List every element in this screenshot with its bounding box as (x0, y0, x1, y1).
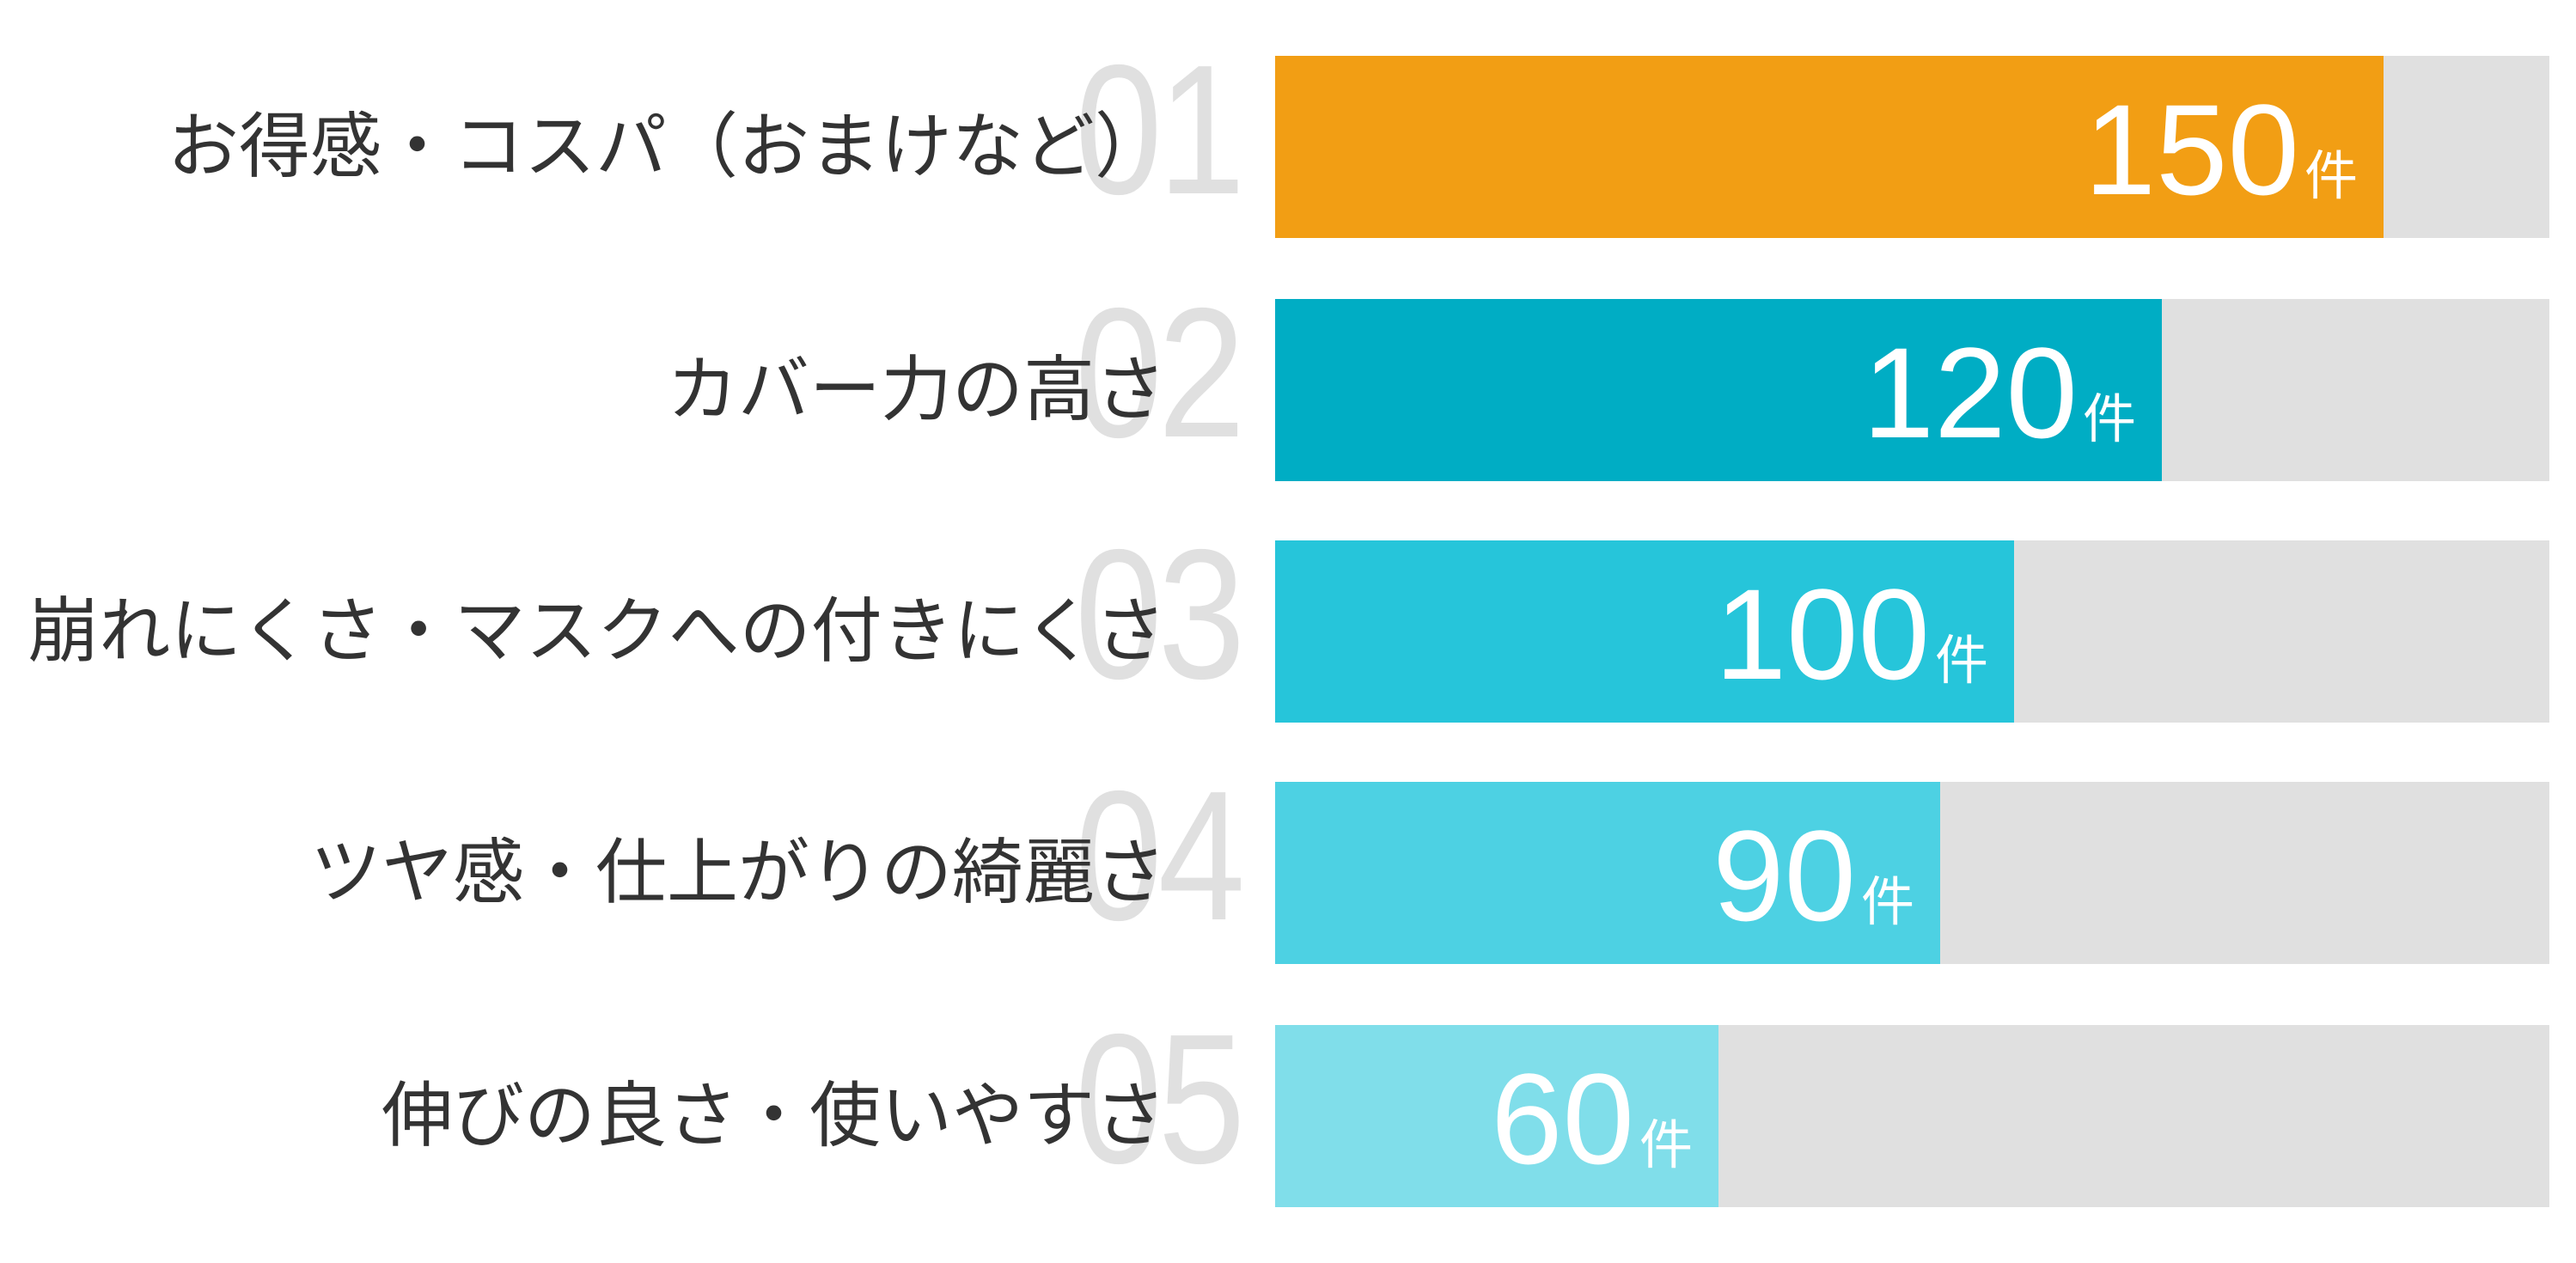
row 3 (27, 510, 2549, 723)
bar 4 (1275, 782, 2549, 964)
label 2: カバー力の高さ (667, 350, 1166, 430)
rank 04: 04 (1075, 752, 1241, 959)
rank 05: 05 (1075, 995, 1241, 1202)
label 1: お得感・コスパ（おまけなど） (168, 107, 1166, 186)
label 5: 伸びの良さ・使いやすさ (382, 1076, 1166, 1156)
label 4: ツヤ感・仕上がりの綺麗さ (310, 833, 1166, 912)
bar 1: 150件 (2085, 77, 2358, 222)
rank 02: 02 (1075, 269, 1241, 476)
row 2 (667, 269, 2549, 481)
bar 2: 120件 (1863, 320, 2136, 465)
bar 4: 90件 (1712, 803, 1914, 948)
rank 03: 03 (1075, 510, 1241, 717)
row 1 (168, 26, 2549, 238)
bar 2 (1275, 299, 2549, 481)
bar 3: 100件 (1715, 562, 1988, 706)
bar 5 (1275, 1025, 2549, 1207)
bar 5: 60件 (1491, 1046, 1693, 1191)
row 4 (310, 752, 2549, 964)
row 5 (382, 995, 2549, 1207)
label 3: 崩れにくさ・マスクへの付きにくさ (27, 591, 1166, 671)
bar 1 (1275, 56, 2549, 238)
bar 3 (1275, 540, 2549, 723)
rank 01: 01 (1075, 26, 1241, 233)
